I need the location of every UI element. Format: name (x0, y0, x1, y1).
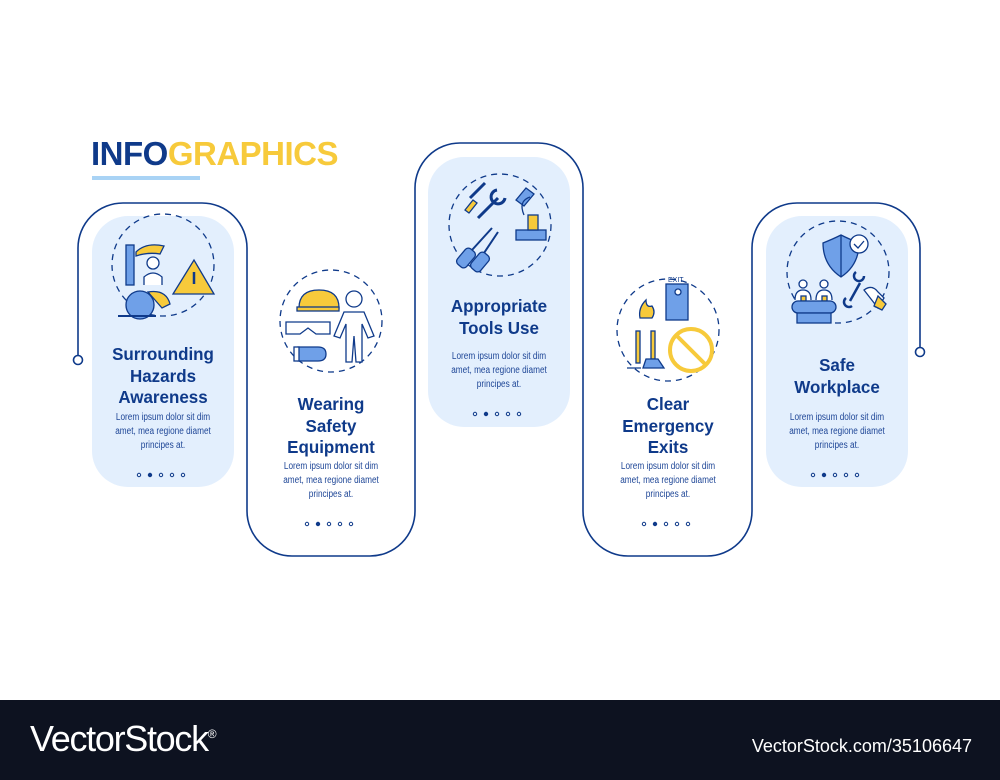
end node (916, 348, 924, 356)
panel 1 text: Lorem ipsum dolor sit dim (116, 412, 210, 423)
panel 2 heading: Safety (306, 416, 356, 436)
footer logo: VectorStock® (30, 718, 215, 759)
icon: safety equipment (280, 270, 382, 372)
panel 3 heading: Tools Use (459, 318, 539, 338)
title underline (92, 176, 200, 180)
panel 2 text: Lorem ipsum dolor sit dim (284, 461, 378, 472)
panel 3 text: amet, mea regione diamet (451, 365, 547, 376)
panel 5 heading: Workplace (794, 376, 880, 396)
panel 3 text (451, 351, 547, 390)
panel 2 heading: Equipment (287, 437, 375, 457)
panel 3 dots (472, 412, 522, 416)
panel 4 heading (622, 394, 714, 457)
panel 4 heading: Emergency (622, 416, 714, 436)
panel 5 heading: Safe (819, 355, 855, 375)
panel 5 text: Lorem ipsum dolor sit dim (790, 412, 884, 423)
panel 1 text: principes at. (141, 440, 185, 451)
panel 4 text: amet, mea regione diamet (620, 475, 716, 486)
panel 3 heading (451, 296, 547, 338)
panel 2 heading (287, 394, 375, 457)
start node (74, 356, 82, 364)
icon: tools (449, 174, 551, 276)
panel 1 dots (136, 472, 186, 478)
panel 1 heading: Hazards (130, 366, 196, 386)
panel 4 text: Lorem ipsum dolor sit dim (621, 461, 715, 472)
connecting outline (78, 143, 920, 556)
icon: emergency exits (617, 277, 719, 381)
panel fill: 5 (766, 216, 908, 487)
panel 5 text: amet, mea regione diamet (789, 426, 885, 437)
panel 4 text (620, 461, 716, 500)
panel 5 text (789, 412, 885, 451)
panel 5 text: principes at. (815, 440, 859, 451)
footer url: VectorStock.com/35106647 (752, 736, 972, 756)
panel 4 text: principes at. (646, 489, 690, 500)
panel 1 heading: Surrounding (112, 344, 214, 364)
panel 2 dots (304, 522, 354, 526)
panel 5 heading (794, 355, 880, 396)
panel 4 heading: Exits (648, 437, 688, 457)
panel fill: 1 (92, 216, 234, 487)
title: INFOGRAPHICS (91, 135, 338, 172)
panel 5 dots (810, 472, 860, 478)
panel 1 heading (112, 344, 214, 407)
panel 4 dots (642, 522, 690, 526)
panel 1 heading: Awareness (118, 387, 208, 407)
icon: hazards (112, 214, 214, 319)
panel 3 text: Lorem ipsum dolor sit dim (452, 351, 546, 362)
panel 3 text: principes at. (477, 379, 521, 390)
icon: emergency exits: EXIT (668, 277, 684, 284)
panel 1 text: amet, mea regione diamet (115, 426, 211, 437)
panel 2 text: principes at. (309, 489, 353, 500)
panel 1 text (115, 412, 211, 451)
panel 3 heading: Appropriate (451, 296, 547, 316)
panel fill: 3 (428, 157, 570, 427)
icon: safe workplace (787, 221, 889, 323)
panel 4 heading: Clear (647, 394, 689, 414)
panel 2 text (283, 461, 379, 500)
footer bar (0, 700, 1000, 780)
panel 2 text: amet, mea regione diamet (283, 475, 379, 486)
panel 2 heading: Wearing (298, 394, 364, 414)
